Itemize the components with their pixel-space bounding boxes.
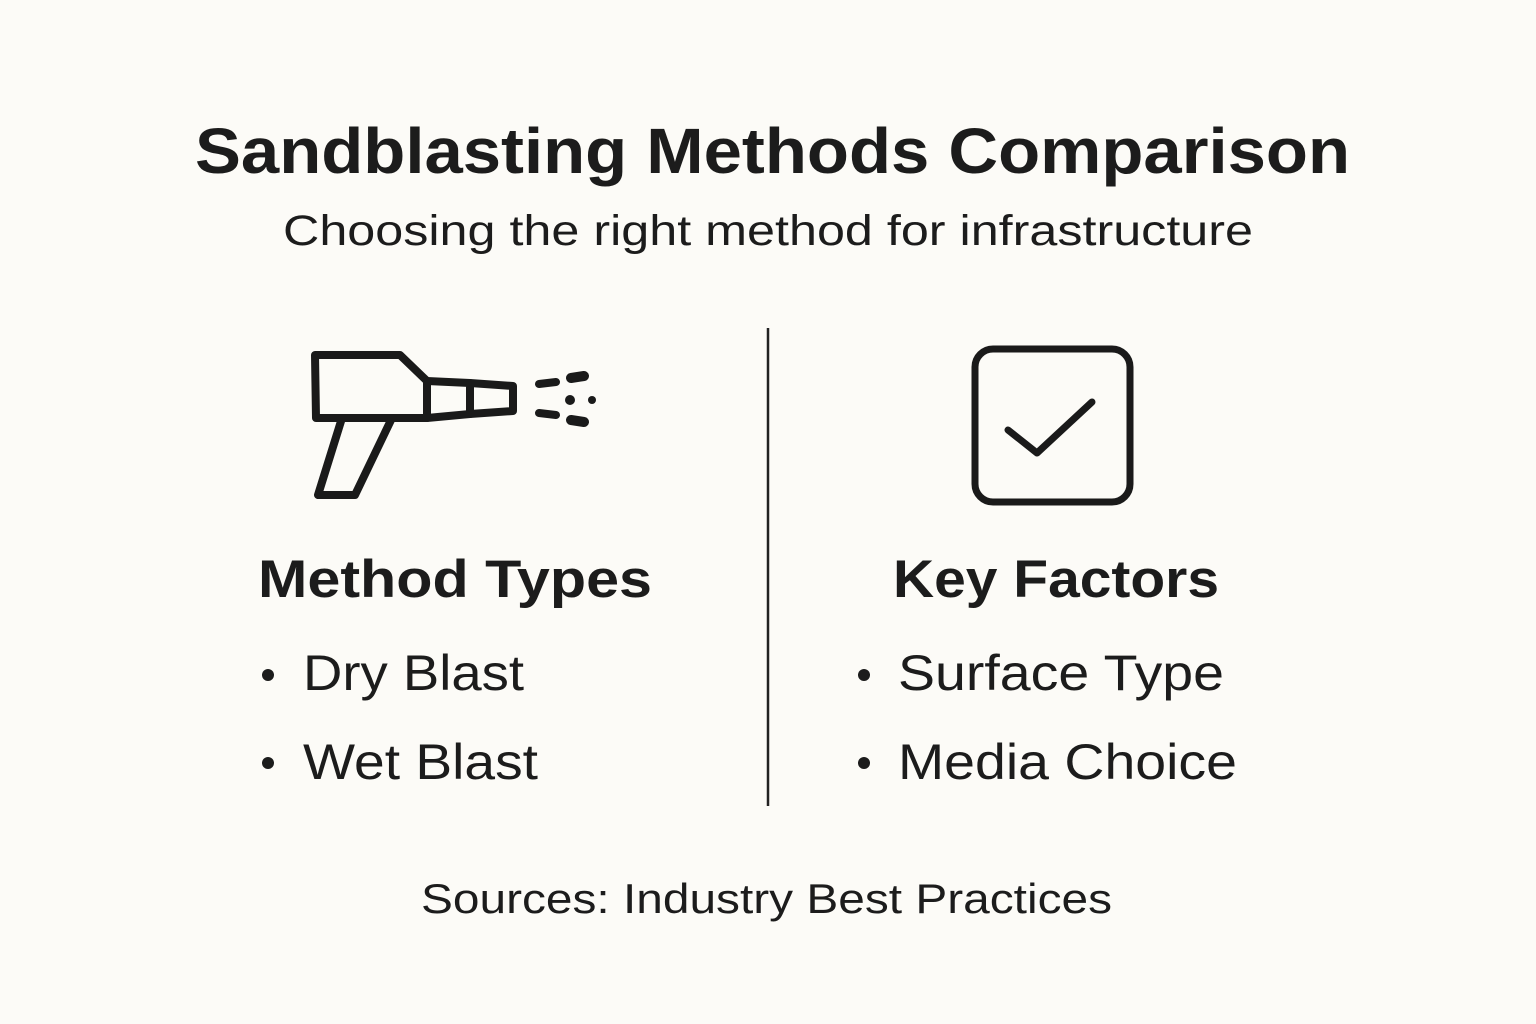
panel: method types [258, 355, 652, 790]
list: key factors: Surface Type [898, 645, 1224, 701]
subtitle: Choosing the right method for infrastructure [283, 207, 1253, 255]
panel: key factors [858, 349, 1237, 790]
heading: key factors: Key Factors [893, 550, 1219, 609]
list: method types [262, 645, 538, 790]
heading: method types: Method Types [258, 550, 652, 609]
divider [767, 328, 769, 806]
icon: checkbox [975, 349, 1130, 502]
icon: sandblasting gun [315, 355, 596, 495]
list: method types: Dry Blast [303, 645, 524, 701]
title: Sandblasting Methods Comparison [195, 115, 1350, 187]
list: key factors: Media Choice [898, 734, 1237, 790]
list: key factors [858, 645, 1237, 790]
list: method types: Wet Blast [303, 734, 538, 790]
sources note: Sources: Industry Best Practices [421, 875, 1112, 922]
